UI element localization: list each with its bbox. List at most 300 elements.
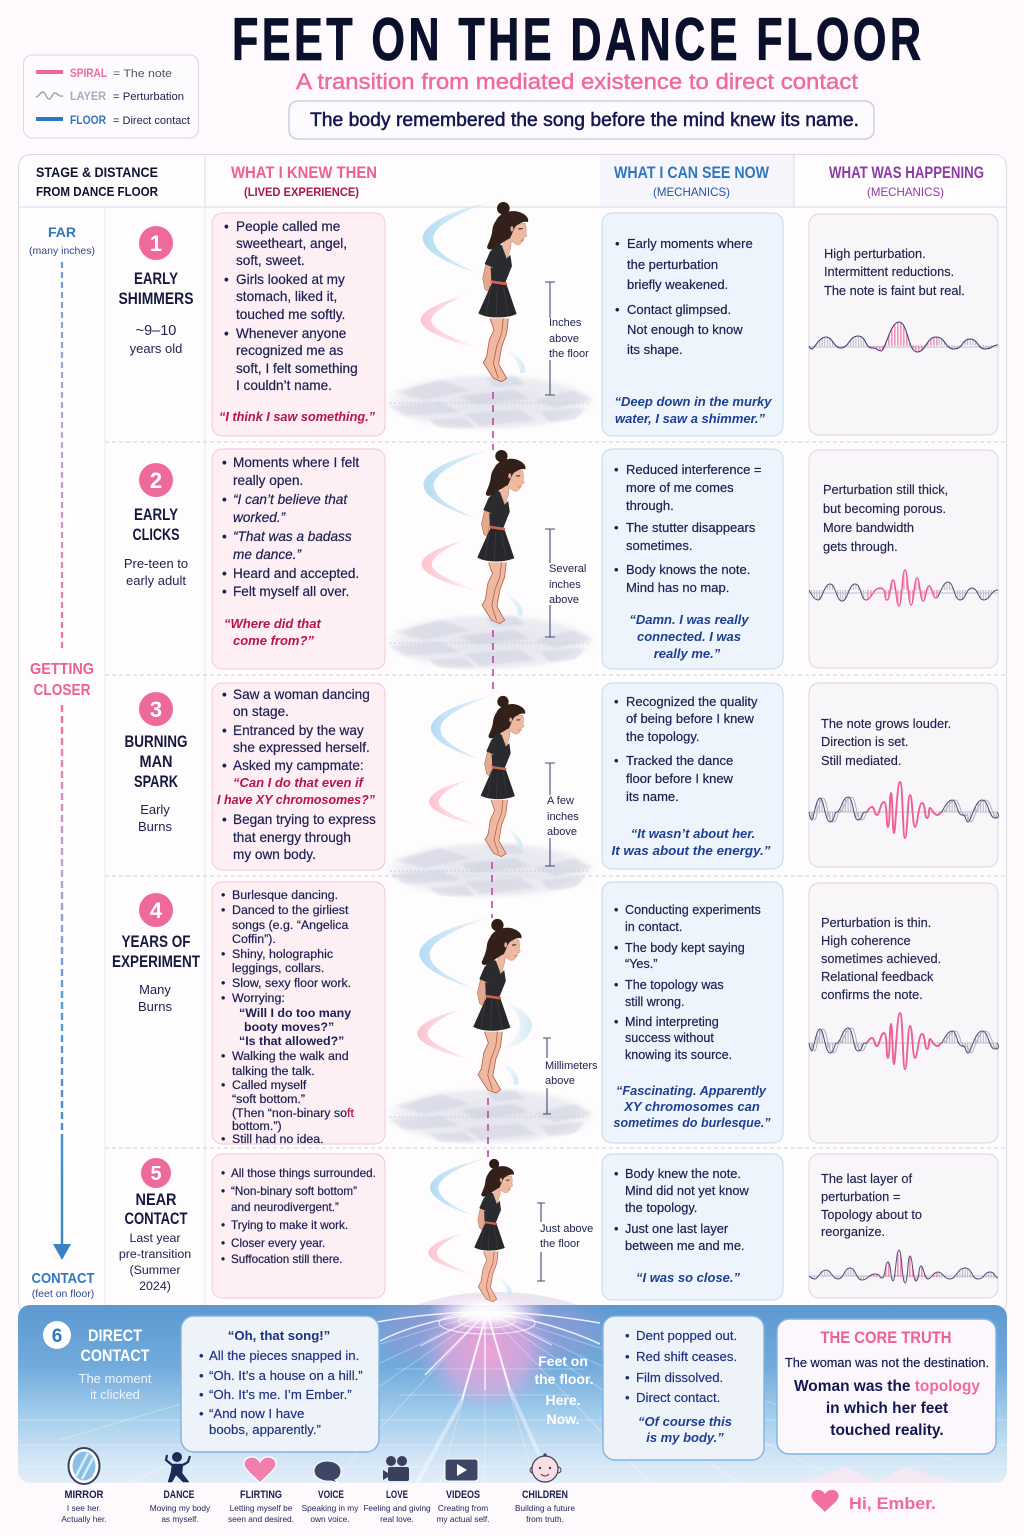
stage 2 lived experience panel: Heard and accepted. bbox=[233, 566, 359, 581]
stage 3 heading bbox=[124, 692, 188, 834]
panel: dissolved: • bbox=[625, 1390, 630, 1405]
quote: “Fascinating. Apparently bbox=[616, 1083, 767, 1098]
stage 2 lived experience panel: Felt myself all over. bbox=[233, 584, 349, 599]
stage 4 lived experience panel: songs (e.g. “Angelica bbox=[232, 918, 349, 932]
stage 3 figure with spiral bbox=[429, 693, 525, 857]
stage 6 heading bbox=[43, 1321, 152, 1402]
stage 3 lived experience panel: Entranced by the way bbox=[233, 723, 364, 738]
quote: XY chromosomes can bbox=[623, 1099, 760, 1114]
subtitle: A transition from mediated existence to direct contact bbox=[296, 69, 858, 94]
column header: what I knew then: WHAT I KNEW THEN bbox=[231, 163, 377, 182]
stage 1 heading bbox=[118, 226, 194, 356]
stage 1 height marker: above bbox=[549, 333, 579, 345]
stage 5 lived experience panel: • bbox=[221, 1253, 225, 1266]
pale dance floor dome above the band bbox=[375, 1292, 619, 1398]
love caption: Feeling and giving bbox=[363, 1503, 431, 1513]
quote bubble: that song: “Oh. It’s me. I’m Ember.” bbox=[209, 1387, 352, 1402]
quote bubble: that song: “And now I have bbox=[209, 1406, 304, 1421]
stage 4 wave panel: High coherence bbox=[821, 933, 911, 948]
quote bubble: that song: • bbox=[199, 1348, 204, 1363]
stage 4 lived experience panel: • bbox=[221, 1049, 225, 1063]
stage 2 lived experience panel: worked.” bbox=[233, 510, 287, 525]
hi ember sign-off: Hi, Ember. bbox=[849, 1494, 936, 1513]
stage 1 mechanics panel: • bbox=[615, 236, 620, 251]
quote: “Of course this bbox=[638, 1414, 732, 1429]
stage 4 lived experience panel: Walking the walk and bbox=[232, 1049, 349, 1063]
quote: “I was so close.” bbox=[636, 1270, 741, 1285]
stage 5 lived experience panel: and neurodivergent.” bbox=[231, 1201, 339, 1214]
stage 4 height marker bbox=[543, 1038, 598, 1114]
stage 5 lived experience panel: All those things surrounded. bbox=[231, 1167, 376, 1180]
quote: “Damn. I was really bbox=[629, 612, 749, 627]
icon: heart bbox=[244, 1457, 276, 1483]
stage 4 mechanics panel: The body kept saying bbox=[625, 941, 745, 955]
stage 2 mechanics panel: • bbox=[614, 520, 619, 535]
stage 3 mechanics panel: • bbox=[614, 694, 619, 709]
floor plane row 3 bbox=[382, 840, 598, 900]
stage 4 mechanics panel: Mind interpreting bbox=[625, 1015, 719, 1029]
stage 4 lived experience panel: (Then “non-binary soft bbox=[232, 1106, 354, 1120]
stage 4 lived experience panel: • bbox=[221, 903, 225, 917]
quote: come from?” bbox=[233, 633, 314, 648]
label: far: (many inches) bbox=[29, 245, 95, 257]
stage 4 wave panel: Relational feedback bbox=[821, 969, 934, 984]
quote bubble: that song: boobs, apparently.” bbox=[209, 1422, 321, 1437]
quote bubble: that song: • bbox=[199, 1368, 204, 1383]
tagline box bbox=[289, 101, 874, 139]
stage 4 mechanics panel: “Yes.” bbox=[625, 957, 657, 971]
love caption: real love. bbox=[380, 1514, 414, 1524]
quote: “Deep down in the murky bbox=[614, 394, 772, 409]
stage 1 heading: EARLY bbox=[134, 269, 179, 288]
stage 2 mechanics panel: more of me comes bbox=[626, 480, 734, 495]
column header: stage bbox=[36, 164, 159, 199]
stage 3 mechanics panel: • bbox=[614, 753, 619, 768]
panel: the core truth: THE CORE TRUTH bbox=[820, 1328, 952, 1347]
drop lines to the floor bbox=[488, 392, 493, 1158]
stage 2 height marker bbox=[545, 529, 586, 637]
videos caption: my actual self. bbox=[436, 1514, 490, 1524]
stage 4 mechanics panel: • bbox=[614, 978, 618, 992]
stage 2 wave panel: More bandwidth bbox=[823, 520, 914, 535]
column header: what was happening bbox=[829, 163, 984, 199]
dance caption: Moving my body bbox=[150, 1503, 211, 1513]
quote: “Where did that bbox=[224, 616, 321, 631]
stage 3 lived experience panel: • bbox=[222, 723, 227, 738]
panel: the core truth: Woman was the topology bbox=[794, 1378, 980, 1395]
stage 1 mechanics panel: Early moments where bbox=[627, 236, 753, 251]
stage 1 mechanics panel: its shape. bbox=[627, 342, 683, 357]
stage 4 heading: YEARS OF bbox=[122, 932, 190, 951]
label: far: FAR bbox=[48, 224, 76, 240]
stage 2 heading: early adult bbox=[126, 573, 186, 588]
stage 2 heading: CLICKS bbox=[132, 525, 180, 544]
stage 4 lived experience panel: • bbox=[221, 976, 225, 990]
stage 4 mechanics panel: • bbox=[614, 941, 618, 955]
stage 1 lived experience panel: I couldn’t name. bbox=[236, 378, 332, 393]
panel: the core truth: The woman was not the destination. bbox=[785, 1356, 989, 1370]
stage 5 lived experience panel: • bbox=[221, 1185, 225, 1198]
stage 5 lived experience panel: Suffocation still there. bbox=[231, 1253, 343, 1266]
videos caption bbox=[436, 1489, 490, 1524]
quote bbox=[638, 1414, 732, 1445]
stage 4 height marker: Millimeters bbox=[545, 1060, 598, 1072]
stage 4 lived experience panel: Worrying: bbox=[232, 991, 285, 1005]
stage 1 lived experience panel: • bbox=[224, 219, 229, 234]
stage 1 height marker bbox=[545, 282, 589, 395]
stage 3 lived experience panel: • bbox=[222, 687, 227, 702]
stage 2 lived experience panel bbox=[212, 449, 385, 669]
quote: connected. I was bbox=[637, 629, 741, 644]
panel: dissolved: Film dissolved. bbox=[636, 1370, 723, 1385]
stage 1 mechanics panel bbox=[602, 213, 783, 436]
stage 5 heading: pre-transition bbox=[119, 1247, 191, 1261]
stage 4 lived experience panel: leggings, collars. bbox=[232, 961, 324, 975]
stage 4 wave panel: Perturbation is thin. bbox=[821, 915, 931, 930]
stage 4 mechanics panel: in contact. bbox=[625, 920, 682, 934]
stage 4 lived experience panel: • bbox=[221, 947, 225, 961]
children caption: from truth. bbox=[526, 1514, 564, 1524]
stage 3 lived experience panel: my own body. bbox=[233, 847, 316, 862]
legend: layer: LAYER bbox=[70, 89, 106, 103]
stage 4 mechanics panel: knowing its source. bbox=[625, 1048, 732, 1062]
stage 3 height marker: inches bbox=[547, 811, 579, 823]
stage 1 heading: SHIMMERS bbox=[118, 289, 194, 308]
stage 5 lived experience panel: • bbox=[221, 1219, 225, 1232]
direct contact band bbox=[18, 1284, 1007, 1483]
mirror caption: Actually her. bbox=[61, 1514, 107, 1524]
stage 2 lived experience panel: • bbox=[222, 584, 227, 599]
stage 5 mechanics panel: the topology. bbox=[625, 1200, 697, 1215]
quote bbox=[614, 1083, 771, 1130]
stage 1 lived experience panel: People called me bbox=[236, 219, 340, 234]
stage 3 heading: SPARK bbox=[134, 772, 179, 791]
quote bubble: that song: “Oh. It’s a house on a hill.” bbox=[209, 1368, 363, 1383]
legend: layer: = Perturbation bbox=[113, 91, 184, 103]
stage 1 lived experience panel: Whenever anyone bbox=[236, 326, 346, 341]
panel: dissolved: Direct contact. bbox=[636, 1390, 720, 1405]
stage 6 heading: The moment bbox=[79, 1371, 152, 1386]
voice caption: own voice. bbox=[310, 1514, 350, 1524]
quote: “Can I do that even if bbox=[233, 775, 365, 790]
flirting caption bbox=[228, 1489, 294, 1524]
dance caption: as myself. bbox=[161, 1514, 199, 1524]
stage 2 wave panel: Perturbation still thick, bbox=[823, 482, 948, 497]
floor plane row 4 bbox=[382, 1086, 598, 1146]
quote bubble: that song: “Oh, that song!” bbox=[228, 1328, 330, 1343]
stage 5 heading: 5 bbox=[150, 1163, 162, 1185]
stage 2 mechanics panel bbox=[602, 449, 783, 669]
stage 4 lived experience panel: Slow, sexy floor work. bbox=[232, 976, 351, 990]
stage 4 heading: EXPERIMENT bbox=[112, 952, 200, 971]
stage 5 heading: Last year bbox=[130, 1231, 180, 1245]
stage 1 wave panel: Intermittent reductions. bbox=[824, 264, 954, 279]
panel: dissolved: Red shift ceases. bbox=[636, 1349, 737, 1364]
quote: “I think I saw something.” bbox=[219, 409, 375, 424]
stage 3 mechanics panel: Tracked the dance bbox=[626, 753, 733, 768]
stage 1 lived experience panel bbox=[212, 213, 385, 436]
stage 4 lived experience panel bbox=[212, 882, 385, 1146]
legend: spiral: SPIRAL bbox=[70, 66, 107, 80]
stage 4 lived experience panel: Danced to the girliest bbox=[232, 903, 349, 917]
legend: spiral: = The note bbox=[113, 68, 172, 80]
stage 3 mechanics panel: Recognized the quality bbox=[626, 694, 758, 709]
column header: what was happening: (MECHANICS) bbox=[867, 185, 944, 199]
stage 2 lived experience panel: “I can’t believe that bbox=[233, 492, 348, 507]
stage 5 mechanics panel: Body knew the note. bbox=[625, 1166, 741, 1181]
stage 4 heading: 4 bbox=[150, 898, 163, 923]
stage 4 mechanics panel: The topology was bbox=[625, 978, 724, 992]
stage 3 mechanics panel bbox=[602, 683, 783, 869]
stage 3 lived experience panel: that energy through bbox=[233, 830, 351, 845]
quote bubble: that song: • bbox=[199, 1406, 204, 1421]
quote: water, I saw a shimmer.” bbox=[615, 411, 765, 426]
stage 1 lived experience panel: touched me softly. bbox=[236, 307, 345, 322]
stage 5 figure with spiral bbox=[428, 1156, 514, 1302]
stage 3 lived experience panel bbox=[212, 683, 385, 870]
stage 3 mechanics panel: floor before I knew bbox=[626, 771, 734, 786]
feet on the floor text: the floor. bbox=[534, 1371, 594, 1387]
stage 2 heading bbox=[124, 463, 188, 588]
stage 5 lived experience panel: • bbox=[221, 1167, 225, 1180]
stage 1 wave panel: The note is faint but real. bbox=[824, 283, 965, 298]
stage 2 mechanics panel: Body knows the note. bbox=[626, 562, 750, 577]
tagline box: The body remembered the song before the mind knew its name. bbox=[310, 110, 859, 131]
quote: It was about the energy.” bbox=[612, 843, 771, 858]
stage 4 wave panel bbox=[809, 883, 998, 1143]
waveform 3 bbox=[809, 782, 998, 838]
dance caption: DANCE bbox=[164, 1489, 194, 1501]
stage 4 wave panel: confirms the note. bbox=[821, 987, 923, 1002]
floor plane row 1 bbox=[382, 372, 598, 432]
stage 4 heading: Many bbox=[139, 982, 171, 997]
stage 5 mechanics panel: Just one last layer bbox=[625, 1221, 729, 1236]
love caption bbox=[363, 1489, 431, 1524]
stage 4 lived experience panel: Coffin”). bbox=[232, 932, 276, 946]
label: contact bbox=[32, 1270, 94, 1300]
stage 2 heading: EARLY bbox=[134, 505, 179, 524]
stage 3 height marker: above bbox=[547, 826, 577, 838]
stage 4 lived experience panel: Shiny, holographic bbox=[232, 947, 333, 961]
stage 1 mechanics panel: Not enough to know bbox=[627, 322, 743, 337]
column header: what I knew then: (LIVED EXPERIENCE) bbox=[244, 185, 359, 199]
feet on the floor text bbox=[534, 1353, 594, 1427]
icon: mirror bbox=[68, 1448, 100, 1484]
panel: the core truth bbox=[777, 1319, 996, 1454]
legend bbox=[24, 55, 198, 138]
label: getting closer: CLOSER bbox=[34, 682, 91, 699]
stage 1 lived experience panel: Girls looked at my bbox=[236, 272, 345, 287]
stage 1 height marker: the floor bbox=[549, 348, 589, 360]
column header: stage: FROM DANCE FLOOR bbox=[36, 184, 159, 199]
quote bbox=[217, 775, 375, 807]
icon: dance bbox=[166, 1452, 190, 1482]
stage 3 mechanics panel: of being before I knew bbox=[626, 711, 755, 726]
stage 4 lived experience panel: • bbox=[221, 991, 225, 1005]
stage 1 lived experience panel: recognized me as bbox=[236, 343, 343, 358]
stage 1 lived experience panel: soft, I felt something bbox=[236, 361, 358, 376]
stage 3 heading: 3 bbox=[150, 697, 162, 722]
stage 1 heading: 1 bbox=[150, 231, 162, 256]
stage 3 mechanics panel: the topology. bbox=[626, 729, 699, 744]
icon: film camera bbox=[383, 1456, 409, 1481]
stage 4 mechanics panel: • bbox=[614, 903, 618, 917]
stage 2 heading: 2 bbox=[150, 468, 162, 493]
stage 3 heading: MAN bbox=[140, 752, 172, 771]
stage 4 lived experience panel: Burlesque dancing. bbox=[232, 888, 338, 902]
stage 4 mechanics panel: Conducting experiments bbox=[625, 903, 761, 917]
stage 1 height marker: Inches bbox=[549, 317, 582, 329]
stage 5 heading bbox=[119, 1158, 191, 1293]
waveform 4 bbox=[809, 1013, 998, 1069]
icon: speech bubble bbox=[314, 1461, 341, 1483]
quote bubble: that song: • bbox=[199, 1387, 204, 1402]
column header: what I can see now: WHAT I CAN SEE NOW bbox=[614, 163, 770, 182]
stage 4 mechanics panel bbox=[602, 882, 783, 1143]
stage 5 mechanics panel: • bbox=[614, 1221, 618, 1236]
waveform 2 bbox=[809, 570, 998, 606]
stage 6 heading: DIRECT bbox=[88, 1326, 143, 1345]
label: getting closer: GETTING bbox=[30, 661, 94, 678]
stage 6 heading: it clicked bbox=[90, 1387, 140, 1402]
stage 3 heading: Burns bbox=[138, 819, 172, 834]
hi ember sign-off bbox=[811, 1490, 936, 1513]
column header: what I can see now bbox=[614, 163, 770, 199]
legend: floor: FLOOR bbox=[70, 113, 106, 127]
stage 2 height marker: inches bbox=[549, 579, 581, 591]
stage 2 lived experience panel: “That was a badass bbox=[233, 529, 352, 544]
flirting caption: Letting myself be bbox=[230, 1503, 293, 1513]
legend: layer bbox=[36, 89, 184, 103]
stage 3 lived experience panel: • bbox=[222, 812, 227, 827]
panel: dissolved: Dent popped out. bbox=[636, 1328, 737, 1343]
love caption: LOVE bbox=[386, 1489, 408, 1501]
stage 6 heading: CONTACT bbox=[80, 1346, 150, 1365]
flirting caption: FLIRTING bbox=[240, 1489, 282, 1501]
stage 4 mechanics panel: • bbox=[614, 1015, 618, 1029]
children caption: Building a future bbox=[515, 1503, 575, 1513]
column header: what I knew then bbox=[231, 163, 377, 199]
stage 5 lived experience panel: Closer every year. bbox=[231, 1237, 325, 1250]
stage 4 lived experience panel: talking the talk. bbox=[232, 1064, 315, 1078]
waveform 1 bbox=[809, 322, 998, 352]
stage 2 lived experience panel: • bbox=[222, 529, 227, 544]
stage 1 lived experience panel: • bbox=[224, 326, 229, 341]
stage 1 lived experience panel: sweetheart, angel, bbox=[236, 236, 347, 251]
stage 4 lived experience panel: “soft bottom.” bbox=[232, 1092, 305, 1106]
stage 2 lived experience panel: • bbox=[222, 492, 227, 507]
column header: what I can see now: (MECHANICS) bbox=[653, 185, 730, 199]
quote: is my body.” bbox=[646, 1430, 724, 1445]
stage 3 wave panel: Still mediated. bbox=[821, 753, 901, 768]
stage 3 lived experience panel: Began trying to express bbox=[233, 812, 376, 827]
stage 2 mechanics panel: through. bbox=[626, 498, 674, 513]
stage 3 wave panel: Direction is set. bbox=[821, 734, 908, 749]
stage 4 wave panel: sometimes achieved. bbox=[821, 951, 941, 966]
panel: dissolved: • bbox=[625, 1328, 630, 1343]
stage 2 height marker: Several bbox=[549, 563, 586, 575]
stage 2 mechanics panel: • bbox=[614, 462, 619, 477]
stage 3 lived experience panel: Saw a woman dancing bbox=[233, 687, 370, 702]
dance caption bbox=[150, 1489, 211, 1524]
stage 5 wave panel: The last layer of bbox=[821, 1171, 912, 1186]
stage 5 wave panel bbox=[809, 1154, 998, 1298]
stage 5 mechanics panel: • bbox=[614, 1166, 618, 1181]
icon: video bbox=[445, 1459, 478, 1481]
arrowhead bbox=[53, 1244, 71, 1260]
mirror caption: I see her. bbox=[67, 1503, 101, 1513]
mirror caption bbox=[61, 1489, 107, 1524]
stage 4 heading bbox=[112, 893, 200, 1014]
stage 4 lived experience panel: “Will I do too many bbox=[239, 1006, 351, 1020]
stage 6 heading: 6 bbox=[52, 1326, 62, 1347]
floor plane row 2 bbox=[382, 612, 598, 672]
stage 4 mechanics panel: still wrong. bbox=[625, 995, 684, 1009]
voice caption: VOICE bbox=[318, 1489, 344, 1501]
stage 2 wave panel: gets through. bbox=[823, 539, 898, 554]
stage 4 lived experience panel: booty moves?” bbox=[244, 1020, 334, 1034]
stage 4 mechanics panel: success without bbox=[625, 1031, 714, 1045]
panel: dissolved: • bbox=[625, 1349, 630, 1364]
stage 5 lived experience panel: • bbox=[221, 1237, 225, 1250]
legend: floor: = Direct contact bbox=[113, 115, 190, 127]
stage 1 heading: years old bbox=[130, 341, 182, 356]
quote: really me.” bbox=[654, 646, 721, 661]
mirror caption: MIRROR bbox=[64, 1489, 104, 1501]
stage 2 lived experience panel: Moments where I felt bbox=[233, 455, 359, 470]
stage 2 height marker: above bbox=[549, 594, 579, 606]
label: getting closer bbox=[30, 661, 94, 699]
stage 3 height marker bbox=[545, 763, 579, 866]
stage 1 mechanics panel: briefly weakened. bbox=[627, 277, 728, 292]
feet on the floor text: Here. bbox=[545, 1392, 581, 1408]
feet on the floor text: Now. bbox=[547, 1411, 579, 1427]
stage 2 wave panel: but becoming porous. bbox=[823, 501, 946, 516]
quote bbox=[629, 612, 749, 661]
stage 4 height marker: above bbox=[545, 1075, 575, 1087]
stage 1 lived experience panel: • bbox=[224, 272, 229, 287]
label: contact: CONTACT bbox=[32, 1270, 94, 1287]
stage 5 wave panel: reorganize. bbox=[821, 1224, 885, 1239]
stage 2 figure with spiral bbox=[422, 447, 525, 624]
stage 3 lived experience panel: • bbox=[222, 758, 227, 773]
stage 2 mechanics panel: Reduced interference = bbox=[626, 462, 762, 477]
stage 3 height marker: A few bbox=[547, 795, 574, 807]
label: contact: (feet on floor) bbox=[32, 1288, 94, 1300]
stage 2 mechanics panel: The stutter disappears bbox=[626, 520, 756, 535]
stage 4 lived experience panel: “Is that allowed?” bbox=[239, 1034, 344, 1048]
stage 3 lived experience panel: she expressed herself. bbox=[233, 740, 370, 755]
panel: the core truth: in which her feet bbox=[826, 1400, 948, 1417]
quote bbox=[612, 826, 771, 858]
children caption bbox=[515, 1489, 575, 1524]
main table frame bbox=[18, 154, 1007, 1314]
stage 2 heading: Pre-teen to bbox=[124, 556, 188, 571]
stage 1 heading: ~9–10 bbox=[136, 323, 176, 339]
quote bubble: that song: All the pieces snapped in. bbox=[209, 1348, 359, 1363]
stage 5 height marker: Just above bbox=[540, 1223, 593, 1235]
stage 2 mechanics panel: • bbox=[614, 562, 619, 577]
stage 1 mechanics panel: the perturbation bbox=[627, 257, 718, 272]
stage 2 wave panel bbox=[809, 450, 998, 668]
quote: “It wasn’t about her. bbox=[631, 826, 755, 841]
stage 5 wave panel: perturbation = bbox=[821, 1189, 900, 1204]
stage 3 heading: BURNING bbox=[124, 732, 188, 751]
waveform 5 bbox=[809, 1250, 998, 1283]
quote bubble: that song bbox=[181, 1316, 379, 1452]
stage 5 heading: 2024) bbox=[139, 1279, 171, 1293]
voice caption bbox=[302, 1489, 359, 1524]
